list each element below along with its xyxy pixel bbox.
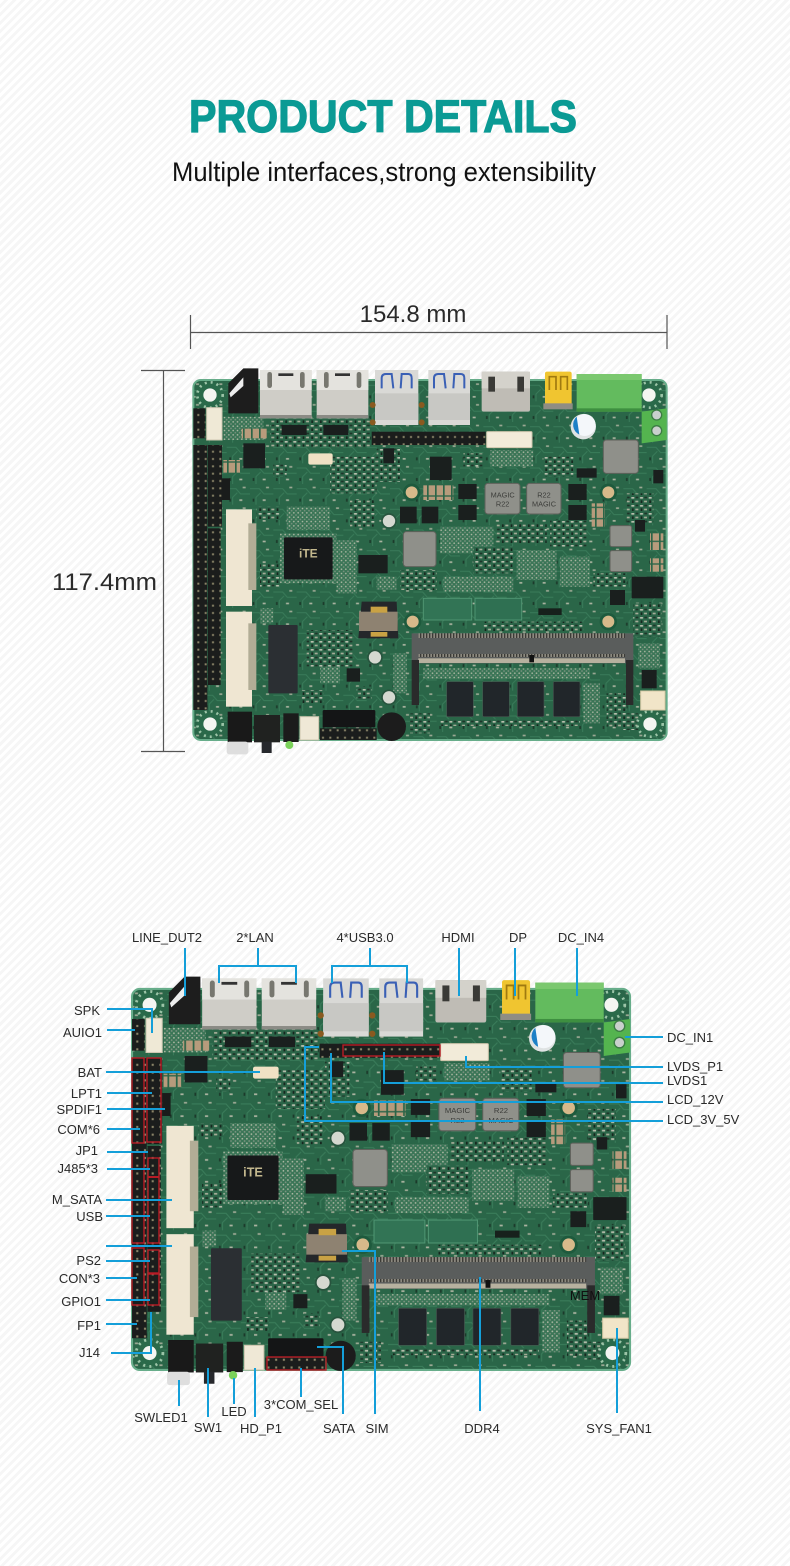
bottom labels: 3*COM_SEL: [264, 1397, 338, 1412]
capacitor: [571, 414, 596, 439]
DDR4 SO-DIMM slot: [412, 633, 633, 705]
left side labels: USB: [76, 1209, 103, 1224]
ITE chip: iTE: [299, 546, 318, 560]
inductor markings: MAGIC: [532, 500, 557, 509]
left side labels: JP1: [76, 1143, 98, 1158]
SIM slot: [358, 602, 398, 638]
subtitle: Multiple interfaces,strong extensibility: [172, 157, 596, 187]
dark ICs: [243, 425, 663, 688]
height dimension: [52, 370, 185, 752]
title: PRODUCT DETAILS: [189, 91, 577, 142]
left side labels: J485*3: [58, 1161, 98, 1176]
HDMI port: [482, 372, 530, 412]
left side labels: BAT: [78, 1065, 102, 1080]
buzzer: [377, 712, 406, 741]
left side labels: GPIO1: [61, 1294, 101, 1309]
inductor markings: [491, 490, 557, 509]
top port labels: DC_IN4: [558, 930, 604, 945]
left side labels: AUIO1: [63, 1025, 102, 1040]
mounting holes: [197, 382, 663, 737]
top port labels: LINE_DUT2: [132, 930, 202, 945]
motherboard photo: annotated: [132, 977, 630, 1385]
left side labels: SPK: [74, 1003, 100, 1018]
mini PCIe slots: [226, 509, 256, 707]
PCB base: [193, 380, 667, 740]
audio jack: [228, 368, 258, 413]
inductor markings: R22: [537, 490, 551, 499]
right side labels: LCD_12V: [667, 1092, 724, 1107]
right side labels: LVDS_P1: [667, 1059, 723, 1074]
bottom labels: [134, 1397, 652, 1436]
top port labels: [132, 930, 604, 945]
left side labels: M_SATA: [52, 1192, 102, 1207]
left side labels: SPDIF1: [56, 1102, 102, 1117]
inductor markings: R22: [496, 500, 509, 509]
SATA connector and header: [320, 710, 377, 740]
USB 3.0 ports: [370, 370, 470, 425]
component patches: [223, 417, 663, 733]
width dimension: 154.8 mm: [360, 301, 466, 328]
top port labels: DP: [509, 930, 527, 945]
white LVDS power connector: [487, 432, 532, 448]
right side labels: LVDS1: [667, 1073, 707, 1088]
top port labels: 4*USB3.0: [336, 930, 394, 945]
DP port: [543, 372, 573, 409]
callout lines: [106, 948, 663, 1417]
left side labels: COM*6: [57, 1122, 100, 1137]
front panel switches and LED: [227, 712, 319, 754]
bottom labels: LED: [221, 1404, 247, 1419]
ITE chip: [280, 533, 337, 583]
height dimension: 117.4mm: [52, 569, 157, 596]
bottom labels: SWLED1: [134, 1410, 188, 1425]
memory chips: [447, 682, 580, 717]
bottom labels: SYS_FAN1: [586, 1421, 652, 1436]
left side labels: FP1: [77, 1318, 101, 1333]
bottom labels: SW1: [194, 1420, 222, 1435]
top long header: [372, 432, 486, 445]
right side labels: DC_IN1: [667, 1030, 713, 1045]
silver screw posts: [368, 514, 396, 704]
system fan connector: [641, 691, 665, 710]
width dimension: [190, 301, 667, 349]
battery connector: [308, 453, 333, 465]
left side labels: CON*3: [59, 1271, 100, 1286]
motherboard photo: top: [193, 368, 667, 754]
right side labels: [667, 1030, 740, 1127]
bottom labels: DDR4: [464, 1421, 500, 1436]
red highlight boxes: [132, 1045, 440, 1370]
left side labels: PS2: [76, 1253, 101, 1268]
left side labels: [52, 1003, 103, 1360]
inductor markings: MAGIC: [491, 490, 515, 499]
LAN ports: [260, 370, 368, 418]
inductors: [403, 440, 638, 572]
brass standoffs: [404, 485, 616, 629]
M.2 socket: [268, 625, 298, 693]
top port labels: HDMI: [441, 930, 475, 945]
bottom labels: SATA: [323, 1421, 355, 1436]
left side labels: J14: [79, 1345, 100, 1360]
left pin headers: [193, 408, 230, 710]
left side labels: LPT1: [71, 1086, 102, 1101]
bottom labels: SIM: [365, 1421, 389, 1436]
bottom labels: HD_P1: [240, 1421, 282, 1436]
right side labels: LCD_3V_5V: [667, 1112, 740, 1127]
green power terminals: [577, 374, 667, 443]
top port labels: 2*LAN: [236, 930, 274, 945]
MEM label: MEM: [570, 1288, 600, 1303]
